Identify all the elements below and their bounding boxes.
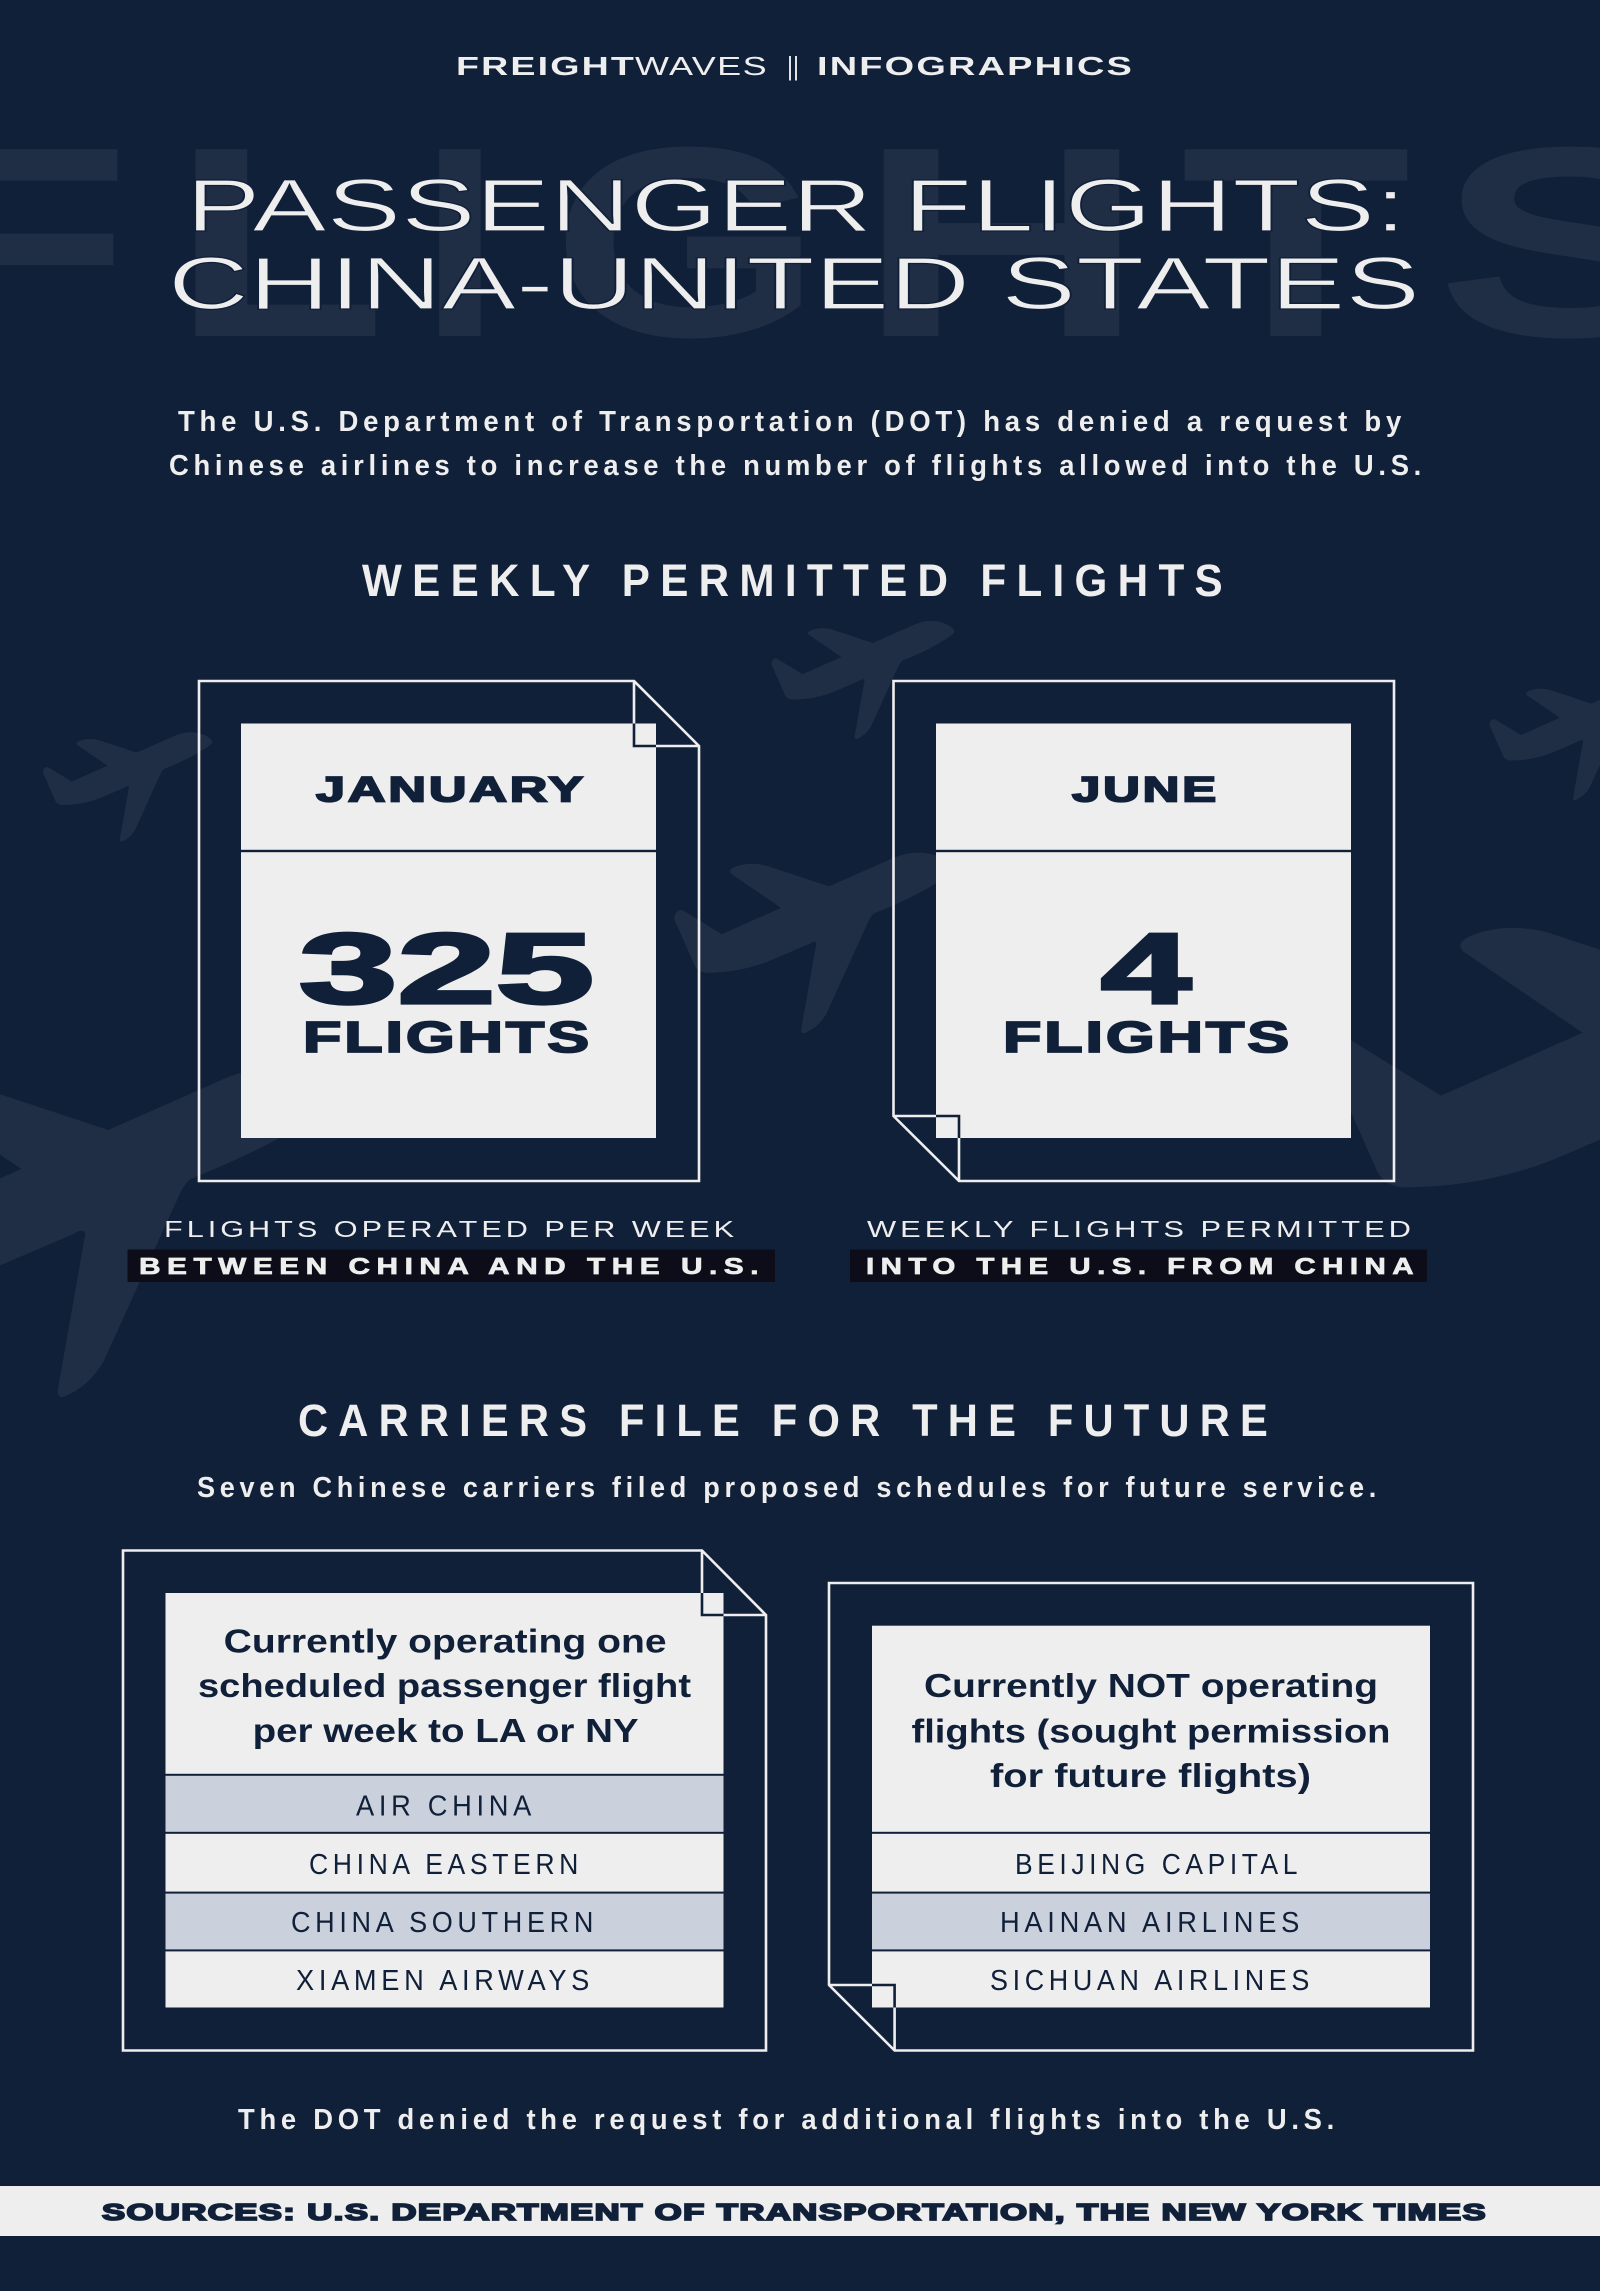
background word: FLIGHTS: G bbox=[557, 101, 818, 385]
background word: FLIGHTS: I bbox=[419, 101, 501, 384]
not operating carriers: HAINAN AIRLINES bbox=[1000, 1907, 1304, 1939]
intro text: Chinese airlines to increase the number of flights allowed into the U.S. bbox=[169, 450, 1426, 482]
not operating fold bbox=[872, 1985, 895, 2008]
operating card bbox=[166, 1593, 724, 2008]
not operating carriers: BEIJING CAPITAL bbox=[1015, 1849, 1302, 1881]
operating carriers: XIAMEN AIRWAYS bbox=[296, 1965, 594, 1997]
not operating striped rows bbox=[872, 1832, 1430, 1951]
intro text: The U.S. Department of Transportation (DOT) has denied a request by bbox=[178, 406, 1406, 438]
caption: june bbox=[850, 1216, 1427, 1282]
operating heading bbox=[198, 1624, 691, 1750]
intro text bbox=[169, 406, 1426, 482]
january label: JANUARY bbox=[316, 770, 586, 810]
caption: january bbox=[128, 1216, 775, 1282]
operating heading: Currently operating one bbox=[224, 1624, 667, 1661]
heading: weekly permitted flights: WEEKLY PERMITTED FLIGHTS bbox=[362, 555, 1233, 606]
sources band: SOURCES: U.S. DEPARTMENT OF TRANSPORTATION, THE NEW YORK TIMES bbox=[102, 2199, 1487, 2225]
june divider bbox=[936, 850, 1351, 852]
brand line bbox=[456, 51, 1134, 81]
title: PASSENGER FLIGHTS: bbox=[186, 164, 1406, 247]
brand line: INFOGRAPHICS bbox=[817, 51, 1134, 81]
june label: JUNE bbox=[1072, 770, 1219, 810]
background planes bbox=[0, 621, 1600, 1397]
june unit: FLIGHTS bbox=[1003, 1014, 1292, 1062]
carriers subheading: Seven Chinese carriers filed proposed schedules for future service. bbox=[197, 1472, 1381, 1504]
panel: june bbox=[894, 681, 1394, 1181]
operating heading: per week to LA or NY bbox=[253, 1713, 639, 1750]
operating carriers bbox=[291, 1790, 598, 1997]
operating heading: scheduled passenger flight bbox=[198, 1668, 691, 1705]
conclusion text: The DOT denied the request for additional flights into the U.S. bbox=[238, 2104, 1339, 2136]
january divider bbox=[241, 850, 656, 852]
not operating heading: for future flights) bbox=[990, 1758, 1311, 1795]
caption: june: WEEKLY FLIGHTS PERMITTED bbox=[867, 1216, 1415, 1242]
caption: january: FLIGHTS OPERATED PER WEEK bbox=[164, 1216, 738, 1242]
background word: FLIGHTS: H bbox=[861, 100, 1142, 384]
not operating card bbox=[872, 1626, 1430, 2008]
operating frame bbox=[123, 1550, 766, 2050]
not operating carriers bbox=[990, 1849, 1314, 1997]
caption: january: BETWEEN CHINA AND THE U.S. bbox=[139, 1253, 765, 1279]
brand line: || bbox=[787, 51, 799, 81]
june card bbox=[936, 724, 1351, 1138]
operating carriers: CHINA SOUTHERN bbox=[291, 1907, 598, 1939]
june value: 4 bbox=[1101, 913, 1192, 1025]
brand line: FREIGHT bbox=[456, 51, 636, 81]
panel: not operating bbox=[829, 1583, 1473, 2050]
background word: FLIGHTS bbox=[0, 100, 1600, 385]
january value: 325 bbox=[299, 913, 594, 1025]
january fold bbox=[634, 724, 656, 746]
june fold bbox=[936, 1116, 959, 1138]
background word: FLIGHTS: T bbox=[1185, 101, 1407, 384]
operating carriers: CHINA EASTERN bbox=[309, 1849, 583, 1881]
not operating heading bbox=[912, 1668, 1390, 1795]
operating carriers: AIR CHINA bbox=[356, 1790, 536, 1822]
background word: FLIGHTS: L bbox=[174, 101, 379, 385]
january frame bbox=[199, 681, 699, 1181]
heading: carriers file for the future: CARRIERS FILE FOR THE FUTURE bbox=[298, 1395, 1278, 1446]
june frame bbox=[894, 681, 1394, 1181]
panel: currently operating bbox=[123, 1550, 766, 2050]
not operating heading: Currently NOT operating bbox=[924, 1668, 1378, 1705]
operating striped rows bbox=[166, 1774, 724, 1951]
january unit: FLIGHTS bbox=[303, 1014, 592, 1062]
title: CHINA-UNITED STATES bbox=[168, 242, 1420, 325]
not operating frame bbox=[829, 1583, 1473, 2050]
caption: june: INTO THE U.S. FROM CHINA bbox=[866, 1253, 1420, 1279]
not operating heading: flights (sought permission bbox=[912, 1714, 1390, 1751]
panel: january bbox=[199, 681, 699, 1181]
brand line: WAVES bbox=[635, 51, 768, 81]
not operating carriers: SICHUAN AIRLINES bbox=[990, 1965, 1314, 1997]
january card bbox=[241, 724, 656, 1138]
title bbox=[168, 164, 1420, 325]
operating fold bbox=[702, 1593, 724, 1615]
sources band bbox=[0, 2186, 1600, 2236]
